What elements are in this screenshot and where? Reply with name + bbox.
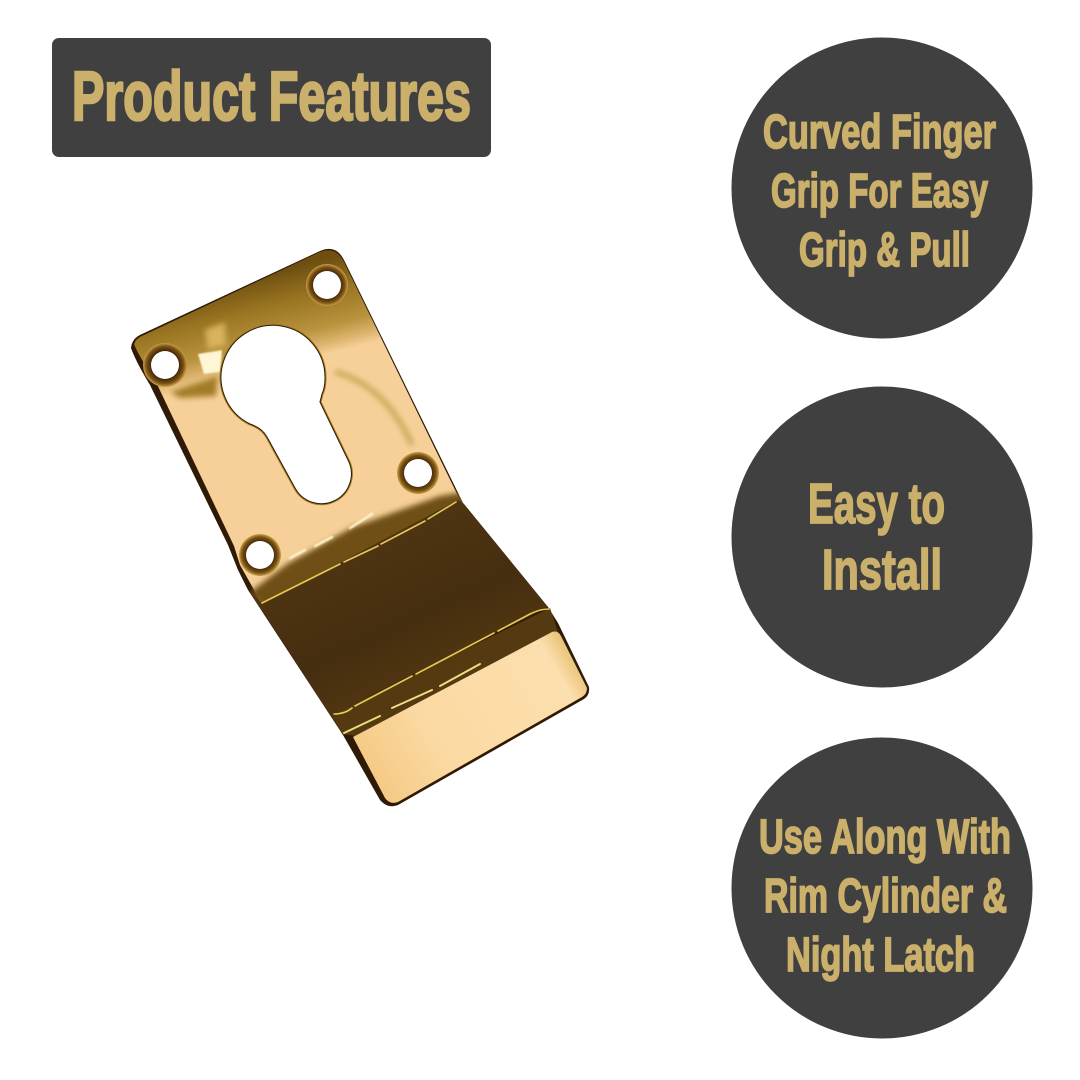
keyhole cut-out <box>221 325 351 504</box>
band highlight lines <box>262 502 549 733</box>
dark outer edge <box>131 249 589 806</box>
feature circle: rim cylinder and night latch <box>732 738 1032 1038</box>
title badge <box>52 38 491 157</box>
product image: brass cylinder pull <box>131 249 589 806</box>
feature circle: rim cylinder and night latch: Night Latch <box>786 929 975 982</box>
title text: Product Features <box>72 57 471 135</box>
lower strip <box>333 608 558 736</box>
recessed finger band <box>249 500 548 735</box>
feature circle: easy to install: Easy to <box>808 472 945 536</box>
upper plate <box>134 250 460 604</box>
feature circle: easy to install: Install <box>822 538 942 602</box>
plate highlights and reflections <box>170 322 412 445</box>
screw hole lower left <box>239 534 281 576</box>
screw hole top left <box>143 343 187 387</box>
feature circle: easy to install <box>732 386 1032 688</box>
feature circle: curved finger grip: Grip & Pull <box>799 224 970 277</box>
feature circle: curved finger grip: Grip For Easy <box>771 165 988 218</box>
feature circle: curved finger grip: Curved Finger <box>763 106 996 159</box>
curved finger grip <box>353 632 587 803</box>
screw hole lower right <box>397 452 439 494</box>
fold above recessed band <box>250 492 466 610</box>
feature circle: curved finger grip <box>732 38 1032 338</box>
screw hole top right <box>306 264 348 306</box>
